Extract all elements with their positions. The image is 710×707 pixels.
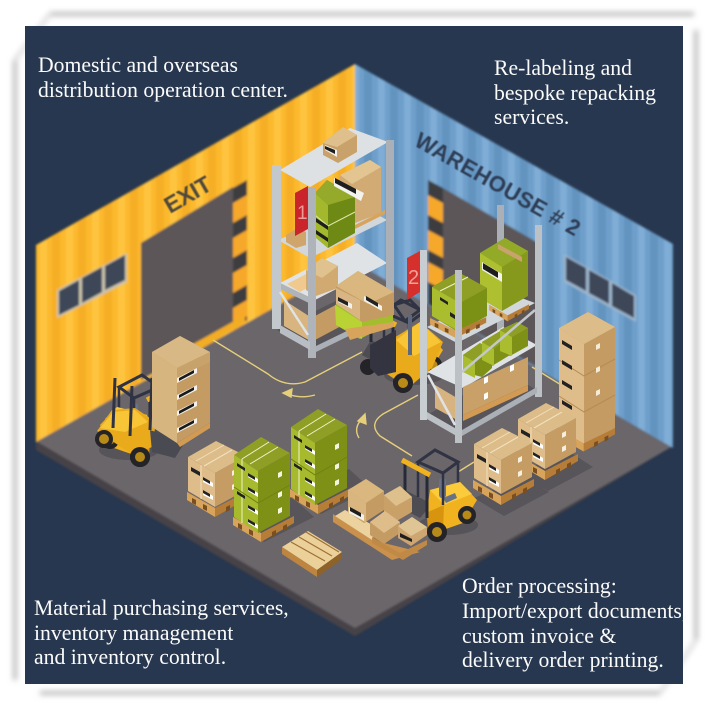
forklift with tall carton stack xyxy=(95,336,210,467)
caption: purchasing and inventory: and inventory control. xyxy=(34,645,226,669)
floor guide lines and arrows xyxy=(213,340,566,472)
forklift in aisle with load xyxy=(335,271,444,393)
pallet of cartons front right xyxy=(473,428,549,516)
loose cartons on pallets xyxy=(333,479,427,560)
red sign 2: 2 xyxy=(408,267,419,289)
rack 1 green cartons xyxy=(315,178,364,248)
rack 1 tall carton xyxy=(340,160,385,229)
pallet of cartons right xyxy=(517,403,593,491)
green pallet tall rear xyxy=(290,409,371,514)
caption: order processing: Import/export documents, xyxy=(462,599,687,623)
empty wooden pallet xyxy=(282,531,342,577)
shelf rack 1 xyxy=(272,127,394,358)
pallet of cartons front left xyxy=(187,441,248,517)
caption: purchasing and inventory: Material purchasing services, xyxy=(34,596,289,620)
caption: order processing: custom invoice & xyxy=(462,624,616,648)
wall lettering: WAREHOUSE # 2: WAREHOUSE # 2 xyxy=(411,128,585,241)
caption: repacking services: services. xyxy=(494,105,569,129)
aisle forklift body xyxy=(360,300,443,393)
caption: purchasing and inventory: inventory management xyxy=(34,621,233,645)
red sign 2 xyxy=(407,251,420,300)
left forklift body xyxy=(95,378,185,467)
small carton on top shelf xyxy=(323,127,357,163)
rack 2 green stack xyxy=(430,272,487,338)
caption: distribution center: Domestic and overseas xyxy=(38,53,238,77)
building shell: walls and floor xyxy=(36,64,673,636)
green pallet front xyxy=(233,437,314,542)
rack 2 tan cartons xyxy=(435,357,528,421)
caption: distribution center: distribution operation center. xyxy=(38,78,288,102)
caption: repacking services: Re-labeling and xyxy=(494,56,632,80)
red sign 1 xyxy=(295,186,308,236)
carried load xyxy=(335,271,394,340)
wall lettering: EXIT: EXIT xyxy=(160,171,216,218)
warehouse illustration xyxy=(36,64,673,636)
rack 2 tall green carton xyxy=(480,238,529,321)
caption: repacking services: bespoke repacking xyxy=(494,81,656,105)
forklift front xyxy=(396,450,478,542)
rack 2 small green cartons xyxy=(463,322,528,378)
tall carton stack at back right xyxy=(557,312,615,452)
red sign 1: 1 xyxy=(297,203,308,224)
shelf rack 2 xyxy=(407,205,542,443)
caption: order processing: Order processing: xyxy=(462,574,617,598)
rack 1 lower carton stacks xyxy=(284,258,345,342)
caption: order processing: delivery order printing. xyxy=(462,648,664,672)
carried cartons xyxy=(152,336,210,447)
